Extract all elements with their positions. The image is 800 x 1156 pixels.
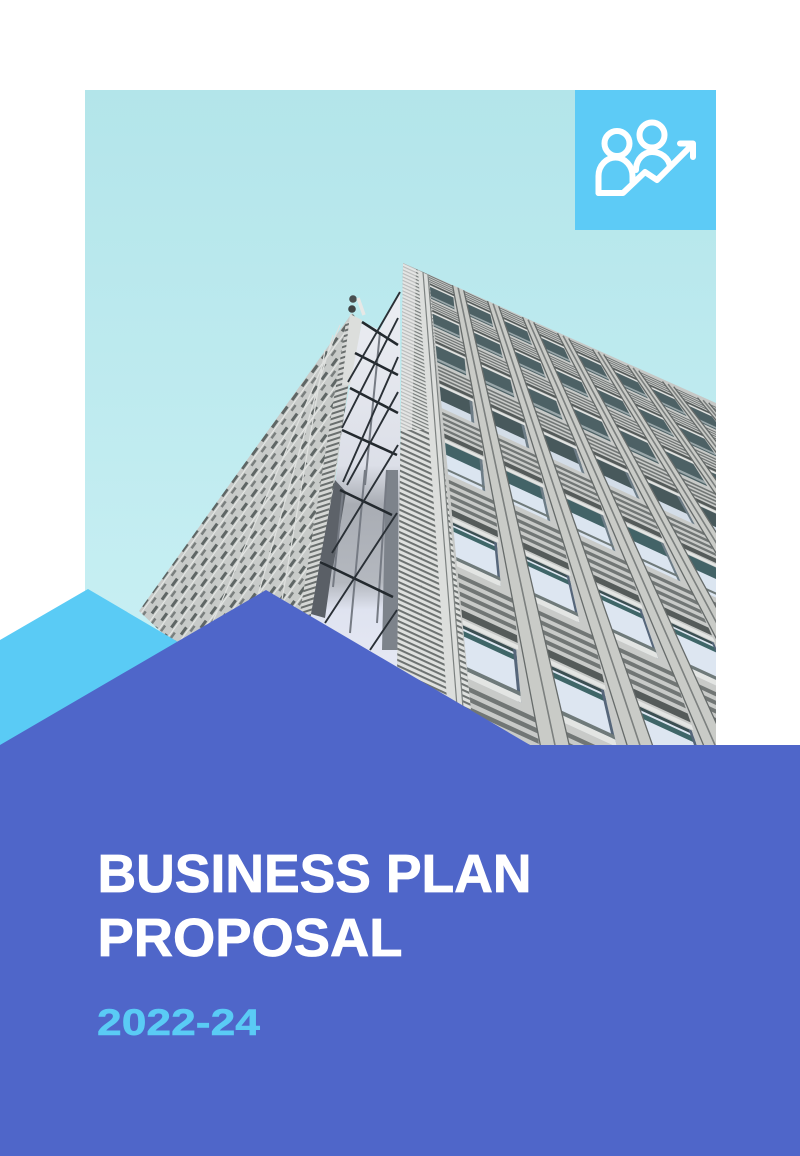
dark blue panel with peak <box>0 590 800 1156</box>
icon: people with growth arrow <box>598 122 693 193</box>
year range: 2022-24 <box>97 1002 260 1043</box>
icon tile <box>575 90 716 230</box>
corner pilaster <box>418 270 464 706</box>
title <box>98 844 532 968</box>
sky <box>85 90 716 632</box>
title: PROPOSAL <box>98 908 402 968</box>
continuous pilasters <box>452 285 730 750</box>
building right facade with window grid <box>397 263 716 745</box>
building left face <box>139 313 362 650</box>
photo: building against sky <box>85 90 716 745</box>
title: BUSINESS PLAN <box>98 844 532 904</box>
rooftop fittings <box>348 295 364 315</box>
building glass section <box>311 290 400 680</box>
light blue peak <box>0 589 190 760</box>
